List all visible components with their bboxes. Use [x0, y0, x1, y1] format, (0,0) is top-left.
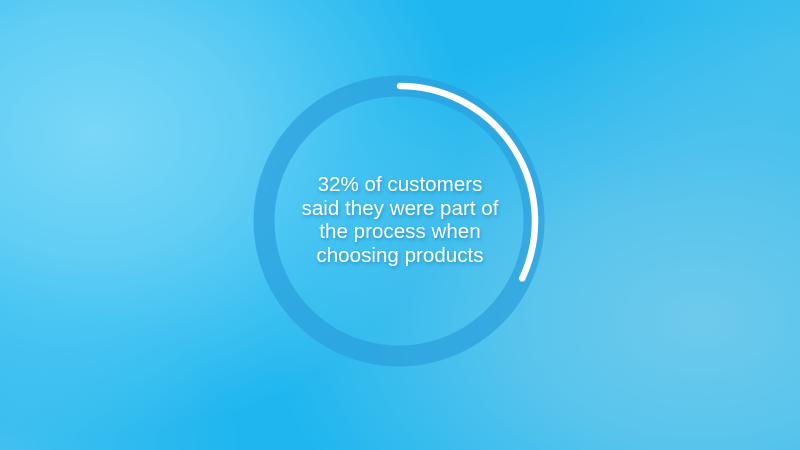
- caption text: choosing products: [316, 244, 484, 267]
- caption text: said they were part of: [302, 197, 498, 220]
- ring track: [264, 86, 534, 356]
- progress arc: [400, 86, 535, 278]
- caption text: 32% of customers: [318, 173, 482, 196]
- caption text: [302, 173, 500, 269]
- caption text: the process when: [319, 220, 481, 243]
